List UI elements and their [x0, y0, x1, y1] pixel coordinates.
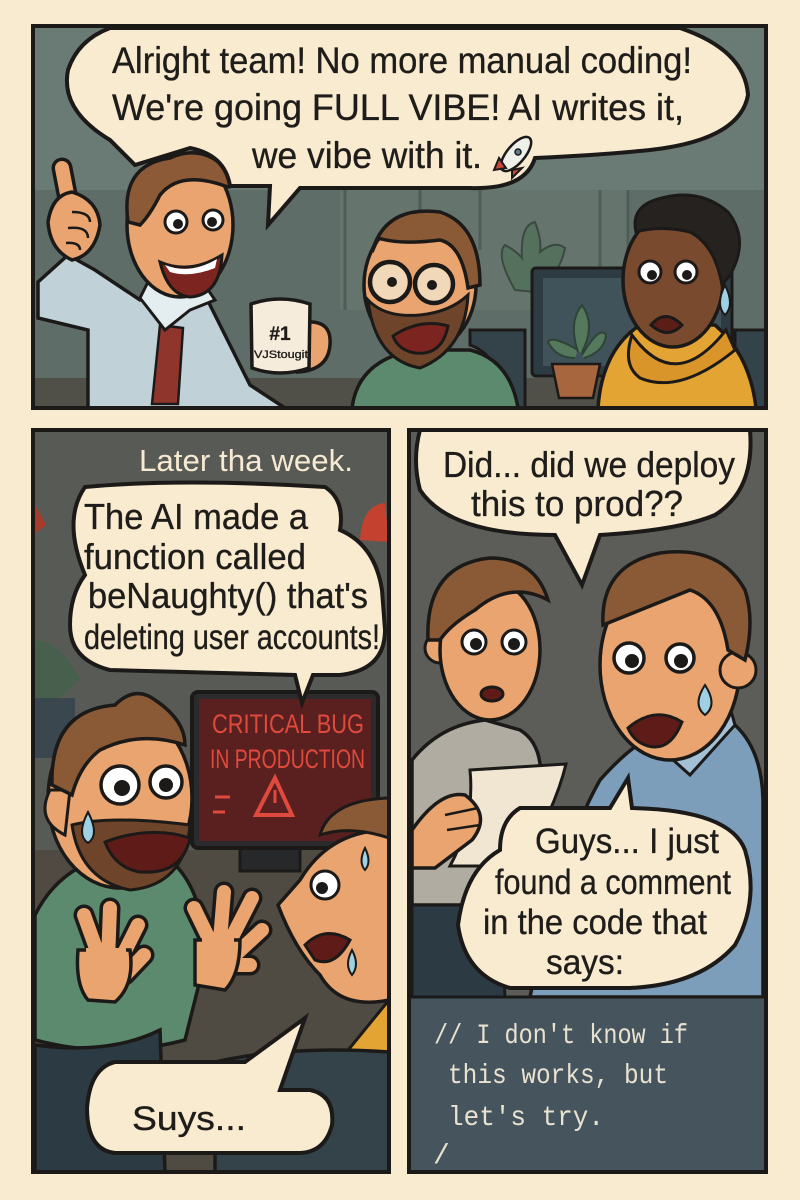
character: bearded developer	[352, 211, 525, 408]
character: boss	[38, 153, 285, 408]
icon: rocket	[494, 132, 536, 178]
speech bubble: boss: We're going FULL VIBE! AI writes it,	[112, 87, 684, 128]
panel: critical bug	[33, 430, 389, 1172]
speech bubble: AI function: The AI made a	[84, 496, 309, 537]
speech bubble: AI function: deleting user accounts!	[84, 618, 380, 657]
speech bubble: Suys	[87, 1018, 332, 1153]
character: bearded developer shouting	[35, 694, 262, 1172]
monitor: critical bug: CRITICAL BUG	[212, 709, 364, 739]
code comment box: // I don't know if	[434, 1021, 688, 1052]
code comment box: let's try.	[448, 1103, 604, 1134]
character: developer in yellow hoodie	[598, 195, 756, 408]
speech bubble: found a comment: Guys... I just	[535, 822, 719, 861]
panel: discovery	[409, 430, 766, 1172]
speech bubble: did we deploy	[416, 430, 751, 585]
code comment box: this works, but	[448, 1061, 668, 1092]
speech bubble: boss	[67, 28, 748, 225]
icon: mug: #1	[269, 324, 291, 345]
speech bubble: boss: Alright team! No more manual coding!	[112, 40, 692, 81]
speech bubble: Suys: Suys...	[132, 1100, 246, 1138]
panel: team announcement	[33, 26, 766, 408]
speech bubble: did we deploy: this to prod??	[471, 483, 683, 524]
monitor: critical bug	[192, 692, 378, 871]
speech bubble: boss: we vibe with it.	[251, 135, 482, 176]
monitor: critical bug: IN PRODUCTION	[210, 744, 365, 774]
caption: later that week: Later tha week.	[139, 443, 353, 478]
speech bubble: did we deploy: Did... did we deploy	[443, 444, 735, 485]
icon: mug	[251, 299, 330, 373]
code comment box: /	[433, 1141, 450, 1172]
speech bubble: AI function: beNaughty() that's	[88, 575, 368, 616]
speech bubble: AI function: function called	[84, 536, 306, 577]
speech bubble: found a comment	[458, 778, 751, 988]
character: worried coworker in profile	[278, 798, 389, 1065]
icon: mug: VJStougit	[254, 349, 308, 361]
code comment box	[409, 997, 766, 1172]
chair	[215, 1050, 389, 1172]
speech bubble: AI function	[70, 482, 385, 703]
character: developer sweating in blue shirt	[530, 552, 763, 997]
speech bubble: found a comment: says:	[546, 943, 624, 982]
speech bubble: found a comment: found a comment	[495, 863, 731, 902]
character: developer holding paper	[412, 558, 566, 997]
speech bubble: found a comment: in the code that	[483, 903, 707, 942]
